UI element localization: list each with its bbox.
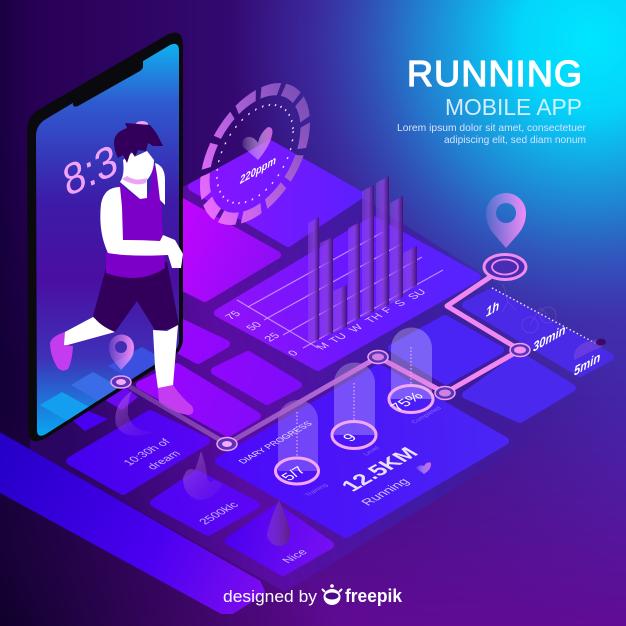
route path bbox=[120, 267, 520, 444]
tile captions: dream bbox=[145, 449, 184, 472]
chart axis labels: W bbox=[347, 323, 367, 334]
front shoe bbox=[158, 385, 193, 415]
time labels: 5min bbox=[574, 349, 600, 379]
dashboard tiles bbox=[70, 144, 610, 572]
distance value: 12.5KM bbox=[335, 444, 424, 495]
chart axis labels bbox=[223, 288, 429, 358]
chart axis labels: S bbox=[392, 299, 409, 308]
designed by credit: designed by bbox=[223, 587, 318, 606]
faint activity icons bbox=[502, 284, 556, 333]
capsule: training bbox=[278, 400, 318, 471]
hair bun bbox=[136, 121, 148, 127]
time labels bbox=[486, 297, 600, 379]
chart grid bbox=[237, 232, 443, 348]
diary heading: DIARY PROGRESS bbox=[236, 420, 315, 465]
heart icon bbox=[242, 127, 272, 160]
flame icon bbox=[183, 451, 223, 500]
isometric platform base bbox=[30, 140, 600, 592]
bar chart bbox=[223, 176, 443, 358]
chart axis labels: TH bbox=[363, 312, 386, 325]
shorts bbox=[93, 262, 179, 332]
progress rings bbox=[276, 347, 433, 484]
heart rate dial bbox=[205, 67, 305, 241]
capsule: completed bbox=[391, 327, 432, 399]
front blue band bbox=[0, 430, 262, 611]
front leg bbox=[153, 325, 178, 389]
car dark end bbox=[596, 338, 606, 346]
progress values: 9 bbox=[339, 431, 361, 444]
chart axis labels: SU bbox=[406, 288, 429, 301]
right shoulder bbox=[155, 163, 165, 205]
freepik logo icon bbox=[322, 584, 342, 605]
title: RUNNING bbox=[407, 53, 582, 94]
runner bbox=[50, 121, 193, 415]
necklace bbox=[122, 176, 147, 184]
phone body bbox=[27, 33, 183, 441]
progress captions: Training bbox=[304, 483, 330, 498]
back leg bbox=[63, 317, 115, 346]
screen tiles bbox=[40, 347, 155, 421]
dial segments bbox=[205, 67, 305, 241]
tile captions bbox=[121, 437, 311, 565]
progress values bbox=[278, 390, 427, 483]
phone bbox=[27, 33, 183, 441]
description bbox=[397, 122, 586, 146]
chart axis labels: 25 bbox=[262, 331, 283, 344]
chart axis labels: 0 bbox=[286, 349, 301, 358]
route nodes bbox=[111, 344, 530, 450]
notch bbox=[73, 61, 143, 107]
chart axis labels: F bbox=[379, 306, 396, 315]
tile captions: 2500klc bbox=[197, 500, 242, 526]
chart axis labels: 50 bbox=[244, 320, 265, 333]
chart bars bbox=[308, 176, 417, 343]
map pin small bbox=[109, 335, 134, 370]
moon icon bbox=[115, 391, 155, 436]
subtitle: MOBILE APP bbox=[445, 94, 582, 120]
freepik wordmark: freepik bbox=[345, 586, 403, 606]
tile captions: Nice bbox=[280, 548, 311, 565]
dial dots bbox=[217, 88, 293, 220]
time labels: 1h bbox=[486, 297, 499, 320]
arm and hand bbox=[100, 187, 183, 268]
progress values: 75% bbox=[387, 390, 427, 414]
progress captions: Completed bbox=[410, 405, 444, 425]
tile captions: 10:30h of bbox=[121, 437, 174, 467]
description: Lorem ipsum dolor sit amet, consectetuer bbox=[397, 122, 586, 134]
chart axis labels: 75 bbox=[223, 309, 244, 322]
time route dotted line bbox=[492, 288, 595, 343]
description: adipiscing elit, sed diam nonum bbox=[444, 134, 586, 146]
running label: Running bbox=[358, 476, 413, 508]
chart axis labels: TU bbox=[327, 332, 350, 345]
back shoe bbox=[50, 332, 73, 371]
hair and cap bbox=[114, 123, 163, 163]
bpm label: 220ppm bbox=[239, 154, 276, 188]
small heart bbox=[416, 462, 431, 474]
progress values: 5/7 bbox=[278, 464, 310, 483]
tank top bbox=[106, 164, 165, 278]
faint car icon bbox=[574, 338, 604, 360]
capsule: level bbox=[334, 362, 375, 435]
map pin large bbox=[486, 193, 526, 248]
destination ring bbox=[484, 254, 526, 280]
phone screen bbox=[36, 44, 179, 436]
neck and face bbox=[120, 151, 154, 199]
drop icon bbox=[267, 500, 290, 546]
progress captions: Level bbox=[362, 446, 381, 457]
progress captions bbox=[304, 405, 444, 498]
chart axis labels: M bbox=[314, 341, 333, 352]
time labels: 30min bbox=[533, 321, 566, 355]
clock text on phone: 8:3 bbox=[59, 135, 122, 206]
